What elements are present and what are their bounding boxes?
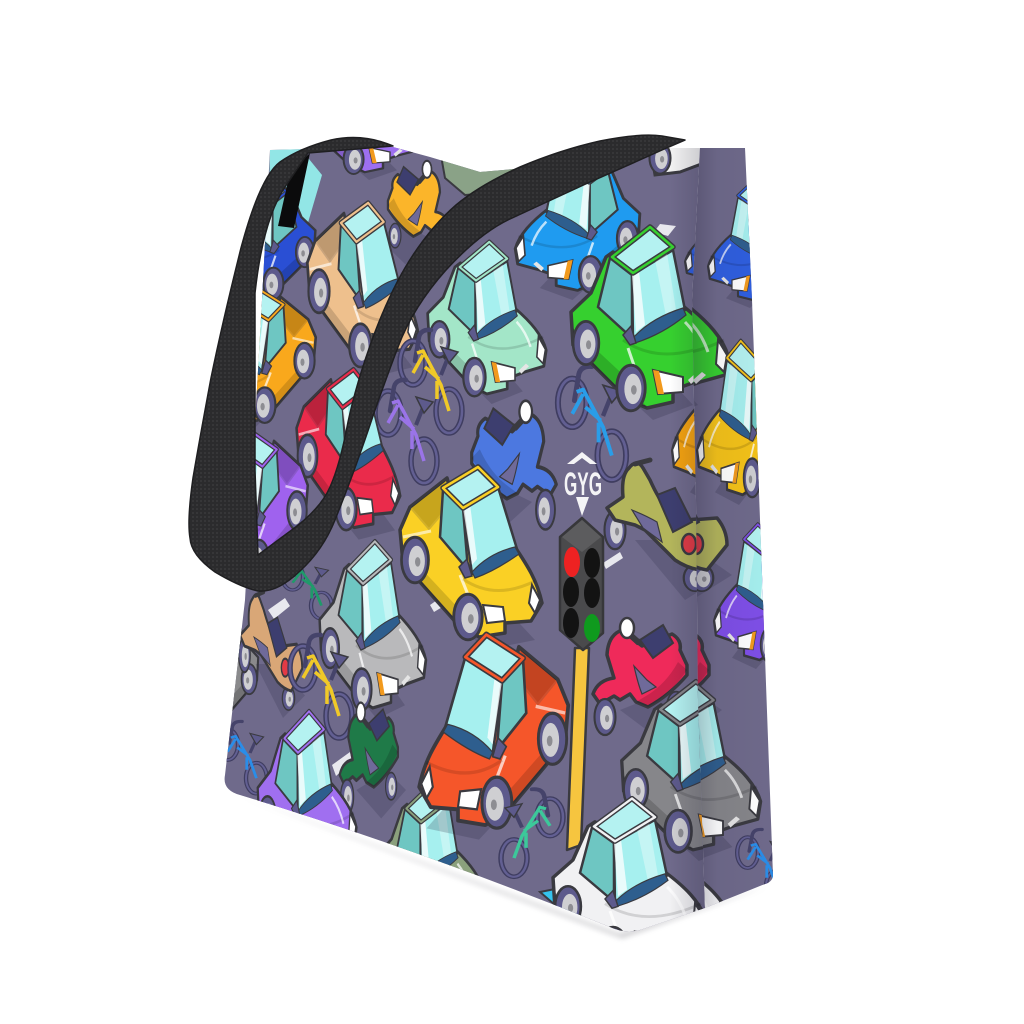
scooter: blue — [470, 399, 558, 531]
bicycle: blue — [558, 366, 626, 480]
scooter: red fold on gusset — [615, 618, 722, 740]
car: mint — [428, 242, 546, 404]
car: white — [553, 799, 705, 978]
car: dark gray fold on gusset — [618, 682, 761, 861]
scooter: dark green — [340, 703, 406, 818]
car: dark blue top left — [262, 187, 317, 299]
car: tan pickup — [307, 203, 418, 377]
bicycle: teal — [501, 789, 563, 877]
logo: GYG — [564, 466, 602, 502]
car: yellow on gusset — [697, 341, 788, 505]
scooter: olive — [604, 458, 697, 600]
traffic light — [560, 518, 603, 650]
fabric base — [210, 130, 720, 950]
scooter: red — [593, 618, 700, 740]
car: blue on gusset — [708, 183, 799, 308]
car: purple top — [333, 147, 414, 180]
car: dark gray — [620, 678, 704, 861]
panel: front face of tote bag with traffic pattern — [224, 147, 705, 932]
car: white fold on gusset — [578, 799, 730, 978]
bag ground shadow — [232, 793, 768, 938]
car: orange fold fragment — [671, 408, 696, 496]
car: blue fragment at bottom — [540, 888, 582, 918]
car: red pickup — [297, 369, 400, 540]
handle opening shadow — [278, 153, 310, 228]
logo — [564, 452, 602, 516]
car: purple lower left — [256, 708, 358, 833]
car: purple pickup left edge — [256, 432, 309, 554]
car: blue fold fragment — [684, 243, 695, 276]
car: purple on gusset — [714, 524, 805, 669]
seam shading on front face — [670, 140, 706, 940]
road dashes — [268, 224, 676, 776]
car: bright blue — [514, 172, 642, 300]
scooter: tan — [239, 592, 305, 718]
car: white top right — [648, 148, 700, 177]
bicycle: yellow lower — [290, 635, 352, 738]
panel: side gusset of tote bag — [576, 140, 805, 978]
car: amber pickup left edge — [256, 289, 317, 426]
strap: black tote handle — [189, 135, 685, 591]
bicycle: purple — [375, 380, 437, 483]
gusset shading — [690, 140, 780, 940]
traffic light pole — [567, 648, 589, 850]
car: gray left edge — [232, 628, 260, 712]
scooter: olive fold on gusset — [612, 460, 732, 600]
bicycle: blue left bottom — [226, 720, 268, 796]
car: olive lower — [386, 792, 479, 876]
scooter: amber — [386, 160, 444, 264]
car: orange pickup — [419, 635, 568, 840]
car: yellow pickup — [400, 467, 542, 650]
bicycle: green small — [282, 566, 333, 620]
car: olive behind strap — [440, 160, 514, 196]
car: green fold on gusset — [576, 227, 728, 420]
teal glass fragment at top corner — [270, 149, 322, 222]
car: silver — [320, 541, 426, 719]
car: green — [569, 224, 694, 420]
gusset fabric — [690, 140, 780, 940]
bicycle: blue on gusset — [737, 829, 787, 902]
bicycle: yellow — [400, 330, 462, 433]
